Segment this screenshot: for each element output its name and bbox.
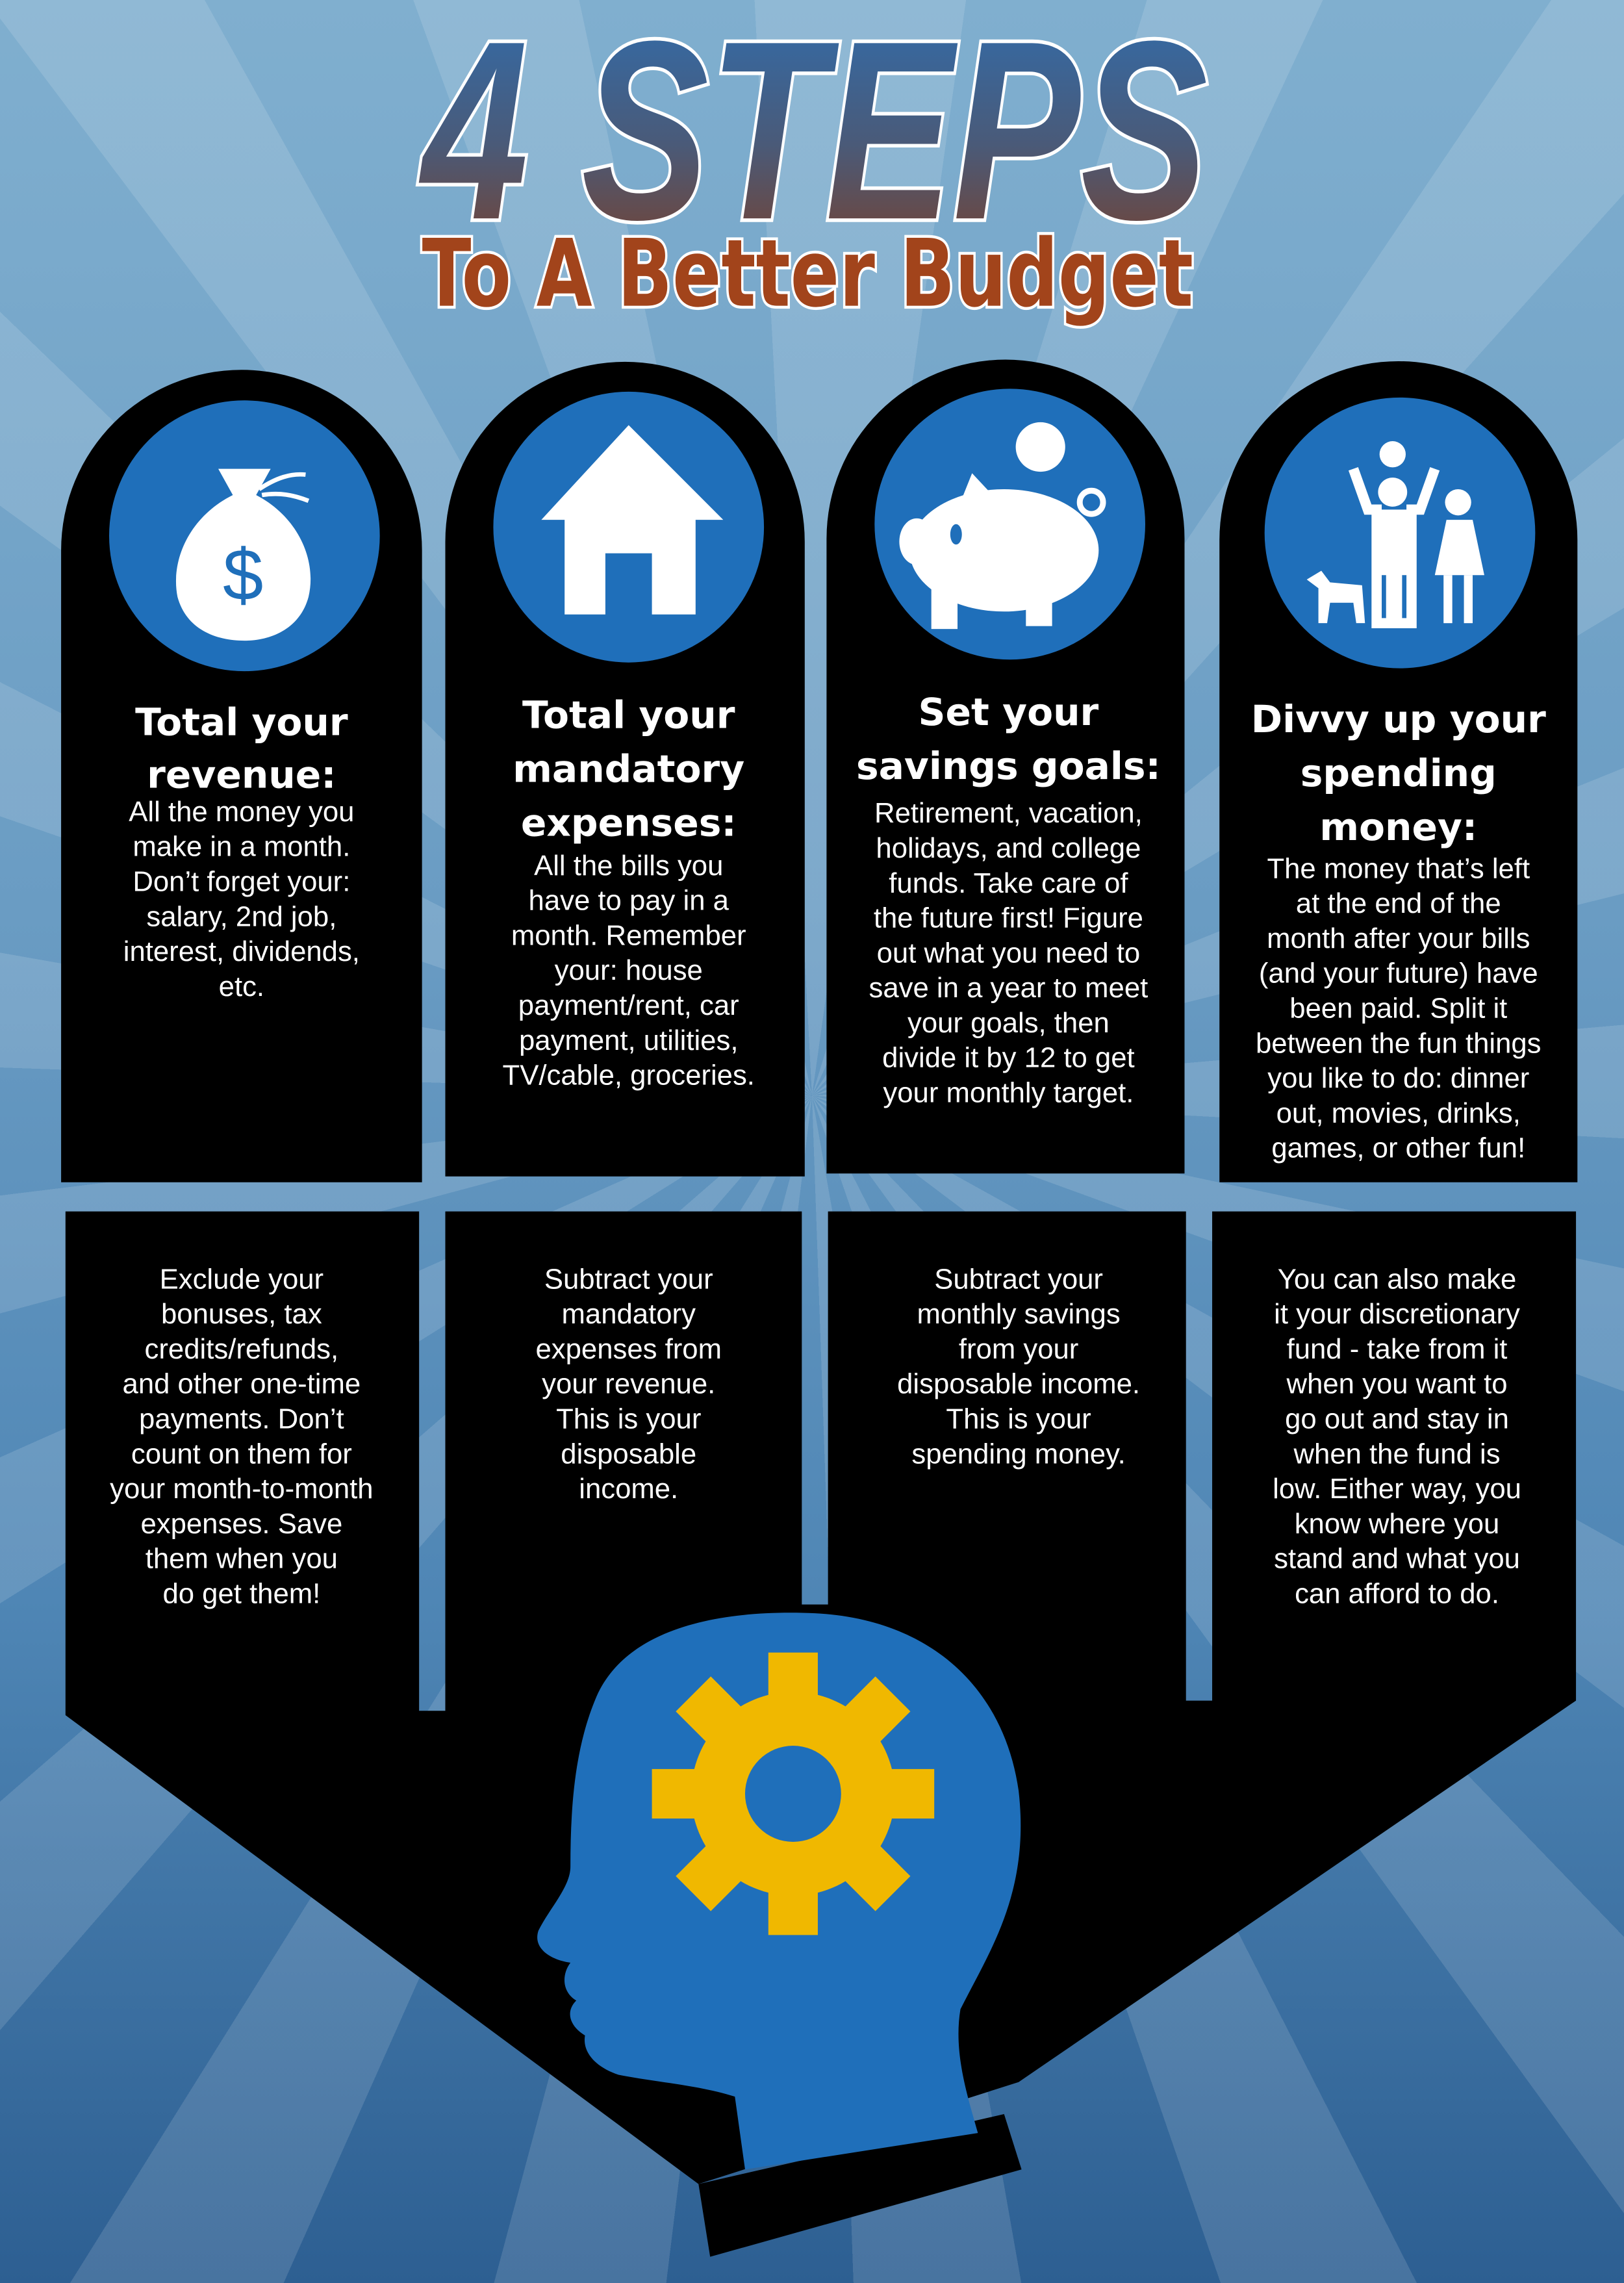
text: step 4: The money that’s left: [1267, 852, 1530, 884]
text: tip 1: payments. Don’t: [139, 1403, 344, 1435]
text: step 4: out, movies, drinks,: [1276, 1097, 1521, 1129]
text: tip 1: Exclude your: [160, 1263, 324, 1295]
heading: step 4: money:: [1319, 805, 1477, 849]
icon: family: [1265, 398, 1535, 669]
text: step 1: salary, 2nd job,: [146, 900, 336, 932]
icon: money bag: [109, 400, 380, 671]
heading: step 4: Divvy up your: [1251, 697, 1546, 741]
text: step 1: make in a month.: [133, 831, 350, 863]
text: step 4: (and your future) have: [1259, 958, 1538, 989]
text: tip 4: stand and what you: [1274, 1543, 1520, 1575]
text: step 4: at the end of the: [1296, 887, 1501, 919]
text: tip 4: go out and stay in: [1285, 1403, 1509, 1435]
icon: money bag: $: [223, 534, 263, 615]
text: tip 1: bonuses, tax: [161, 1298, 322, 1330]
text: tip 4: can afford to do.: [1295, 1577, 1499, 1609]
text: tip 3: monthly savings: [917, 1298, 1121, 1330]
heading: step 2: expenses:: [521, 800, 737, 845]
heading: step 4: spending: [1300, 751, 1497, 795]
text: tip 2: Subtract your: [544, 1263, 713, 1295]
text: step 3: your goals, then: [907, 1007, 1110, 1039]
text: step 3: holidays, and college: [876, 832, 1141, 864]
text: tip 4: know where you: [1295, 1508, 1499, 1540]
icon: house: [493, 392, 764, 663]
text: tip 4: low. Either way, you: [1273, 1473, 1521, 1505]
text: step 3: funds. Take care of: [889, 867, 1128, 899]
text: step 1: Don’t forget your:: [133, 866, 350, 898]
text: tip 2: This is your: [556, 1403, 701, 1435]
text: step 2: All the bills you: [534, 850, 723, 882]
text: step 3: save in a year to meet: [869, 972, 1148, 1004]
icon: piggy bank: [874, 389, 1145, 659]
icon: head with gear: [537, 1613, 1022, 2257]
heading: step 1: Total your: [135, 700, 348, 745]
text: step 4: been paid. Split it: [1289, 993, 1507, 1025]
heading: step 2: mandatory: [513, 746, 744, 791]
text: tip 3: disposable income.: [897, 1368, 1140, 1400]
text: tip 1: expenses. Save: [140, 1508, 342, 1540]
text: step 2: your: house: [555, 954, 703, 986]
heading: step 3: Set your: [919, 690, 1099, 734]
title: To A Better Budget: [422, 220, 1193, 328]
text: step 4: games, or other fun!: [1271, 1132, 1525, 1164]
text: tip 1: them when you: [146, 1543, 338, 1575]
text: tip 4: it your discretionary: [1274, 1298, 1520, 1330]
text: tip 4: You can also make: [1278, 1263, 1516, 1295]
text: step 2: payment/rent, car: [518, 989, 739, 1021]
text: tip 1: do get them!: [162, 1577, 320, 1609]
text: tip 3: Subtract your: [934, 1263, 1103, 1295]
text: step 2: TV/cable, groceries.: [503, 1060, 755, 1091]
text: tip 2: your revenue.: [542, 1368, 715, 1400]
text: step 3: your monthly target.: [883, 1077, 1134, 1108]
text: tip 2: mandatory: [562, 1298, 696, 1330]
text: tip 4: when you want to: [1286, 1368, 1508, 1400]
text: tip 3: This is your: [946, 1403, 1091, 1435]
text: step 1: All the money you: [129, 796, 354, 828]
text: tip 3: from your: [959, 1333, 1078, 1365]
text: step 1: etc.: [219, 971, 264, 1002]
text: tip 3: spending money.: [911, 1438, 1126, 1470]
text: tip 1: count on them for: [131, 1438, 352, 1470]
text: step 1: interest, dividends,: [123, 936, 360, 967]
text: step 4: month after your bills: [1267, 923, 1530, 954]
text: step 3: divide it by 12 to get: [882, 1042, 1135, 1074]
text: step 3: Retirement, vacation,: [874, 797, 1143, 829]
text: tip 2: income.: [579, 1473, 678, 1505]
text: tip 2: expenses from: [536, 1333, 722, 1365]
heading: step 2: Total your: [522, 693, 735, 737]
bottom funnel panel: [66, 1212, 1576, 2184]
text: step 4: you like to do: dinner: [1267, 1062, 1529, 1094]
title: [416, 0, 1209, 328]
text: step 4: between the fun things: [1256, 1027, 1542, 1059]
heading: step 1: revenue:: [147, 752, 336, 797]
text: tip 1: your month-to-month: [110, 1473, 374, 1505]
heading: step 3: savings goals:: [856, 744, 1161, 788]
text: step 2: have to pay in a: [529, 885, 730, 917]
panel: step 4: [1219, 361, 1577, 1182]
text: tip 4: when the fund is: [1293, 1438, 1501, 1470]
text: step 3: out what you need to: [877, 937, 1140, 969]
panel: step 3: [826, 360, 1184, 1173]
panel: step 2: [445, 362, 805, 1177]
panel: step 1: [61, 370, 422, 1182]
text: step 3: the future first! Figure: [874, 902, 1143, 934]
text: tip 2: disposable: [561, 1438, 696, 1470]
text: step 2: month. Remember: [511, 919, 746, 951]
text: tip 4: fund - take from it: [1287, 1333, 1507, 1365]
text: tip 1: and other one-time: [123, 1368, 361, 1400]
text: tip 1: credits/refunds,: [145, 1333, 338, 1365]
text: step 2: payment, utilities,: [519, 1025, 738, 1056]
